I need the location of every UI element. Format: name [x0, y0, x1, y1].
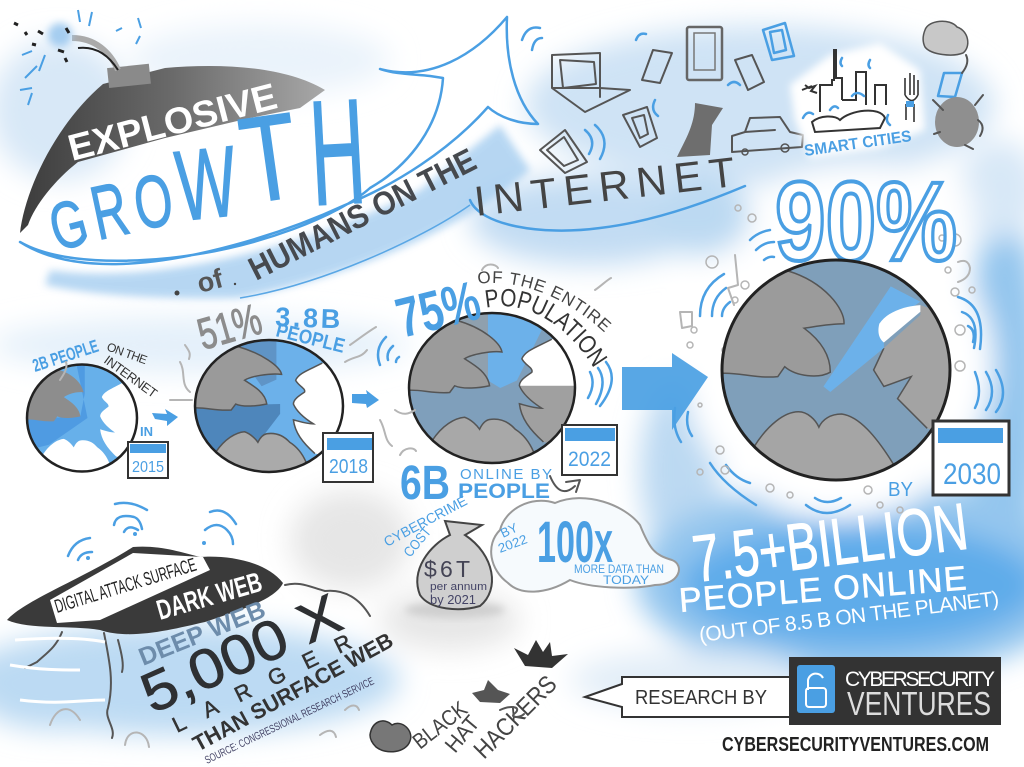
arrow 2015 to 2018: [152, 409, 178, 426]
calendar 2018: 2018: [329, 456, 368, 478]
calendar 2015: [128, 424, 168, 478]
connected devices sketches: [522, 23, 803, 173]
research by arrow: RESEARCH BY: [635, 687, 767, 709]
title: Growth: H: [306, 67, 369, 237]
title: Growth: T: [232, 87, 307, 229]
stage 2022: heading: 75%: [390, 268, 486, 350]
calendar 2015: IN: [140, 424, 153, 439]
stage 2018: heading: 51%: [192, 295, 267, 360]
caption: 6B people online by: PEOPLE: [458, 480, 550, 503]
stat: 7.5+ billion people online: (OUT OF 8.5 B ON THE PLANET): [698, 587, 1000, 647]
signal waves around globes: [378, 230, 1003, 513]
hacker scribbles and black hats: [370, 640, 568, 752]
money bag: cybercrime cost: $6T: [424, 556, 470, 582]
title: Growth: G: [41, 184, 95, 265]
money bag: cybercrime cost: per annum: [430, 581, 487, 593]
digital attack surface island: DIGITAL ATTACK SURFACE: [52, 555, 199, 618]
bomb scribble behind title: [14, 10, 325, 233]
smart cities panel: [790, 43, 925, 158]
title: Explosive: EXPLOSIVE: [64, 75, 281, 169]
globe 2030: [722, 260, 950, 480]
stage 2022: heading: [390, 268, 612, 367]
stage 2015: heading: ON THE: [105, 340, 149, 367]
water ripples and roots: [10, 584, 370, 747]
cloud: 100x more data: MORE DATA THAN: [574, 562, 664, 576]
deep web 5000x stat: THAN SURFACE WEB: [188, 628, 397, 756]
gray doodles around globes: [60, 205, 975, 513]
title: Growth: [41, 67, 369, 265]
stage 2015: heading: INTERNET: [101, 352, 160, 401]
cloud: 100x more data: BY: [498, 520, 520, 541]
calendar 2015: 2015: [132, 459, 164, 476]
calendar 2018: [323, 433, 373, 482]
label: by: BY: [888, 479, 913, 501]
black hat hackers label: HACKERS: [468, 670, 562, 764]
stage 2018: heading: PEOPLE: [274, 320, 347, 358]
deep web 5000x stat: SOURCE: CONGRESSIONAL RESEARCH SERVICE: [203, 676, 376, 767]
black hat hackers label: HAT: [440, 711, 485, 757]
caption: 6B people online by: 6B: [400, 457, 450, 510]
deep web 5000x stat: DEEP WEB: [135, 595, 269, 672]
stat: 90%: 90%: [775, 159, 957, 284]
cloud: 100x more data: 100x: [537, 510, 613, 575]
stat: 7.5+ billion people online: [678, 489, 1000, 647]
stage 2015: heading: 2B PEOPLE: [30, 336, 101, 376]
caption: 6B people online by: ONLINE BY: [460, 466, 552, 483]
stage 2022: heading: OF THE ENTIRE: [478, 271, 612, 332]
big arrow to 2030: [622, 353, 708, 430]
deep web 5000x stat: [131, 581, 397, 767]
title: humans on the: HUMANS ON THE: [242, 141, 482, 287]
cybersecurity ventures logo: VENTURES: [847, 685, 991, 722]
stat: 7.5+ billion people online: PEOPLE ONLINE: [678, 559, 968, 620]
research by arrow: [585, 677, 790, 717]
calendar 2030: [933, 421, 1009, 495]
globe 2015: [27, 364, 137, 472]
money bag: cybercrime cost: COST: [400, 523, 434, 560]
globe 2022: [409, 313, 575, 463]
stage 2018: heading: [192, 295, 347, 360]
arrow swoosh: [20, 17, 745, 298]
title: internet: INTERNET: [472, 148, 737, 225]
money bag: cybercrime cost: by 2021: [430, 592, 476, 607]
deep web 5000x stat: LARGER: [168, 629, 355, 737]
cybersecurity ventures logo: [789, 657, 1001, 725]
cloud: 100x more data: [491, 498, 679, 592]
calendar 2030: 2030: [943, 458, 1001, 491]
title: of: [174, 263, 236, 299]
arrow 2018 to 2022: [352, 390, 379, 408]
money bag: cybercrime cost: [381, 492, 505, 618]
cloud: 100x more data: TODAY: [603, 573, 649, 587]
digital attack surface island: DARK WEB: [153, 566, 265, 626]
title: Growth: W: [171, 125, 242, 243]
money bag: cybercrime cost: CYBERCRIME: [381, 492, 470, 550]
stage 2022: heading: POPULATION: [486, 288, 608, 367]
blue brush band under arrow: [45, 125, 530, 298]
title: of: of: [194, 263, 227, 299]
brain, wearable and turtle-globe icons: [923, 21, 983, 149]
calendar 2022: 2022: [568, 448, 611, 471]
stage 2015: heading: [30, 336, 160, 401]
title: Growth: O: [129, 158, 178, 245]
stage 2018: heading: 3.8B: [275, 302, 341, 334]
wifi signals above dark web: [68, 503, 236, 560]
calendar 2022: [562, 425, 617, 475]
caption: 6B people online by: [400, 457, 580, 510]
digital attack surface island: [7, 547, 283, 634]
deep web 5000x stat: 5,000 X: [131, 581, 351, 725]
globe 2018: [195, 340, 343, 472]
cybersecurity ventures logo: CYBERSECURITY: [845, 668, 995, 691]
smart cities label: SMART CITIES: [803, 128, 913, 160]
title: Growth: R: [84, 166, 136, 257]
black hat hackers label: BLACK: [408, 696, 472, 754]
cloud: 100x more data: 2022: [496, 531, 529, 556]
black hat hackers label: [408, 670, 562, 764]
